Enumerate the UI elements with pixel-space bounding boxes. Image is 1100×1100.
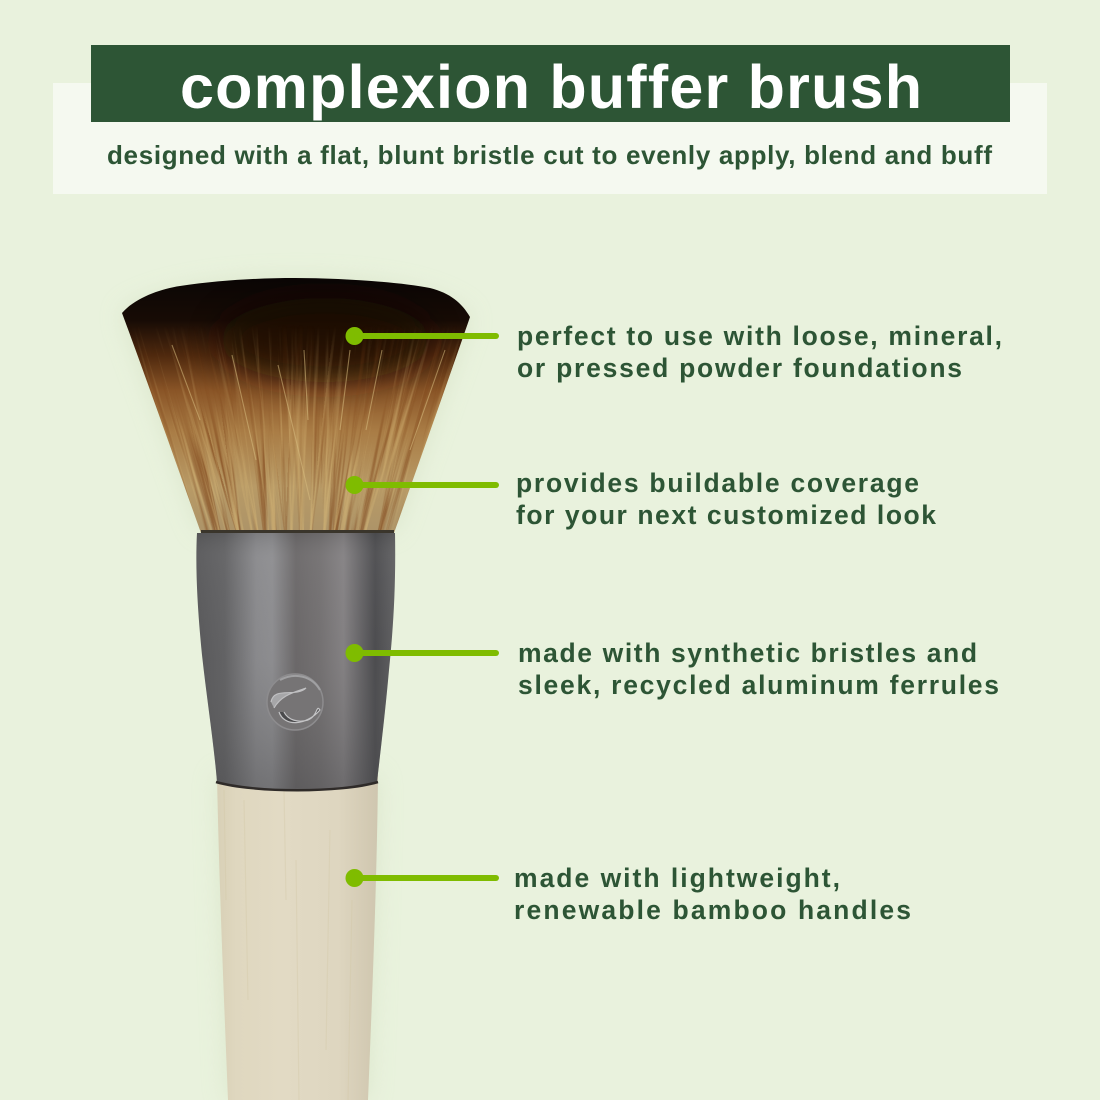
callout text 2 [516, 468, 936, 530]
callout 3: synthetic bristles and ferrules [346, 638, 999, 700]
callout text 2: for your next customized look [516, 500, 936, 530]
callout text 3: made with synthetic bristles and [518, 638, 977, 668]
callout text 4: made with lightweight, [514, 863, 840, 893]
callout 1: powder foundations [346, 321, 1002, 383]
connector line 2 [346, 476, 499, 494]
connector line 1 [346, 327, 499, 345]
title: complexion buffer brush [180, 53, 922, 121]
connector line 4 [346, 869, 499, 887]
callout text 2: provides buildable coverage [516, 468, 919, 498]
bristles [122, 277, 470, 533]
callout text 1 [517, 321, 1002, 383]
callout text 1: perfect to use with loose, mineral, [517, 321, 1002, 351]
connector line 3 [346, 644, 499, 662]
callout text 1: or pressed powder foundations [517, 353, 962, 383]
icon: embossed leaf logo [267, 674, 323, 730]
callout 4: bamboo handles [346, 863, 911, 925]
callout text 3: sleek, recycled aluminum ferrules [518, 670, 999, 700]
brush photo illustration [110, 270, 480, 1100]
subtitle: designed with a flat, blunt bristle cut to evenly apply, blend and buff [107, 140, 992, 170]
callout 2: buildable coverage [346, 468, 936, 530]
bamboo handle [217, 775, 378, 1100]
callout text 4: renewable bamboo handles [514, 895, 911, 925]
title banner [91, 45, 1010, 122]
subtitle panel [53, 83, 1047, 194]
callout text 3 [518, 638, 999, 700]
aluminum ferrule [196, 533, 395, 790]
callout text 4 [514, 863, 911, 925]
